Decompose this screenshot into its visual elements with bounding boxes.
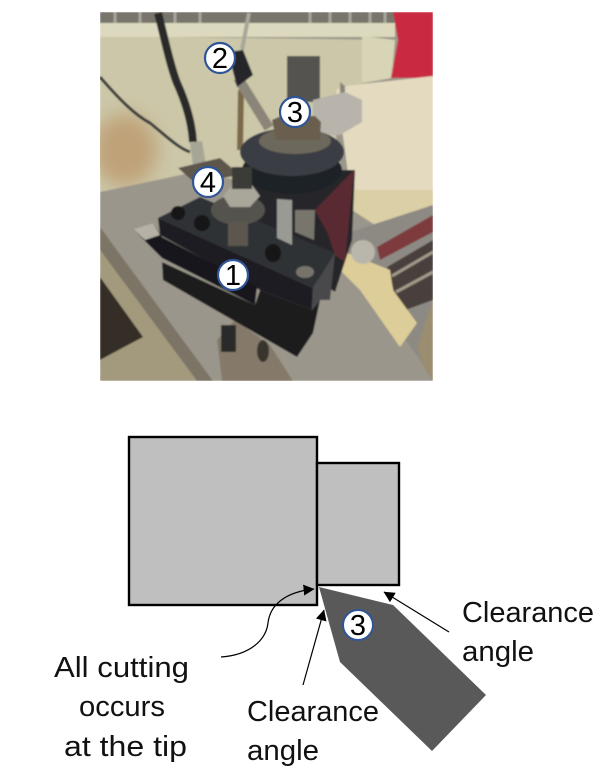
label: all cutting occurs at the tip: All cutting	[54, 652, 189, 684]
arrow: lower clearance angle	[303, 610, 324, 685]
arrow: right clearance angle	[384, 592, 449, 632]
label: lower clearance angle: angle	[247, 735, 319, 767]
callout 4	[193, 167, 223, 199]
callout 2: 2	[212, 43, 228, 75]
callout 3	[280, 97, 310, 129]
label: all cutting occurs at the tip: occurs	[79, 691, 165, 723]
arrow: cutting tip	[221, 589, 314, 657]
callout 3 on tool: 3	[350, 610, 366, 642]
callout 1: 1	[225, 260, 241, 292]
label: all cutting occurs at the tip: at the tip	[64, 731, 187, 763]
label: right clearance angle: Clearance	[462, 597, 594, 629]
callout 4: 4	[200, 167, 216, 199]
cutting tool	[319, 587, 486, 751]
label: lower clearance angle	[247, 696, 379, 767]
label: lower clearance angle: Clearance	[247, 696, 379, 728]
callout 2	[205, 43, 235, 75]
photo: lathe tool post	[93, 12, 433, 381]
label: right clearance angle	[462, 597, 594, 668]
label: right clearance angle: angle	[462, 636, 534, 668]
callout 3 on tool	[343, 610, 373, 642]
workpiece: small section	[317, 463, 399, 585]
callout 3: 3	[287, 97, 303, 129]
workpiece: large section	[129, 437, 317, 605]
callout 1	[218, 260, 248, 292]
label: all cutting occurs at the tip	[54, 652, 189, 763]
